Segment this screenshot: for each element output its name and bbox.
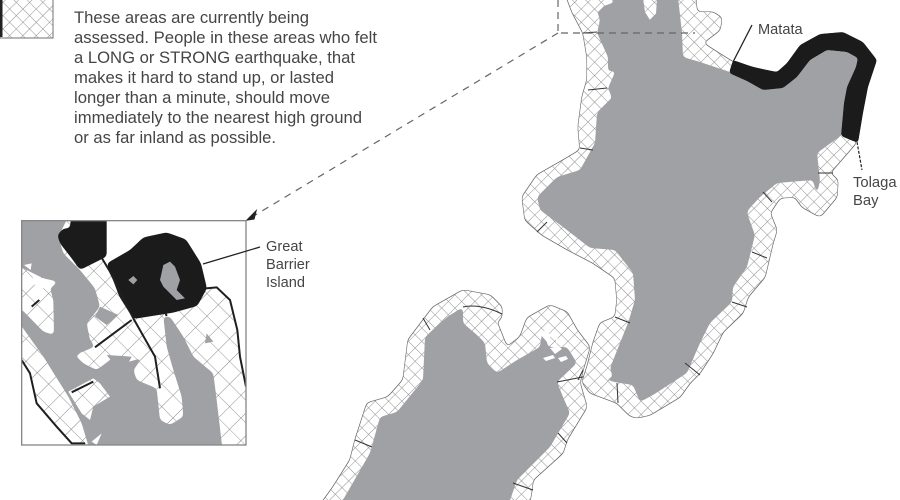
north island map	[522, 0, 877, 418]
inset hatched zone	[22, 221, 246, 445]
inset land patches on the hatch	[95, 307, 213, 367]
north island hatched coastal zone	[522, 0, 857, 418]
Great Barrier Island land	[160, 262, 185, 300]
inset white harbour fragments	[24, 263, 102, 445]
black warning strip: Matata to Tolaga Bay	[729, 32, 877, 143]
legend text block: These areas are currently being	[74, 9, 309, 27]
label: Great Barrier Island: Island	[266, 275, 305, 291]
south island land	[336, 307, 577, 500]
north island inner hatched inlet	[643, 0, 657, 20]
south island hatched coastal zone	[315, 290, 590, 500]
label: Great Barrier Island: Great	[266, 239, 302, 255]
label: Tolaga Bay: Tolaga	[853, 175, 897, 191]
inset northern black zone	[58, 221, 107, 269]
legend text block	[74, 9, 377, 147]
label leader: Tolaga Bay	[857, 142, 862, 170]
south island map	[315, 290, 593, 500]
legend text block: longer than a minute, should move	[74, 89, 330, 107]
inset land	[22, 221, 222, 444]
north island zone boundary ticks	[537, 32, 833, 403]
inset frame	[22, 221, 246, 445]
north island land	[537, 0, 860, 402]
inset hatched peninsula patch	[68, 378, 110, 420]
legend swatch: hatched assessment area	[0, 0, 53, 38]
label: Great Barrier Island: Barrier	[266, 257, 310, 273]
inset coastline and boundary lines	[22, 255, 246, 443]
label: Matata: Matata	[758, 22, 803, 38]
dashed callout frame and arrow to inset	[247, 0, 695, 220]
label leader: Matata	[733, 25, 752, 62]
inset map: Great Barrier Island area	[21, 220, 247, 446]
small island land	[128, 276, 137, 284]
north island top-left harbour fragment	[590, 0, 614, 14]
legend text block: assessed. People in these areas who felt	[74, 29, 377, 47]
label: Tolaga Bay: Bay	[853, 193, 879, 209]
legend text block: or as far inland as possible.	[74, 129, 276, 147]
legend text block: makes it hard to stand up, or lasted	[74, 69, 334, 87]
south island sound fragments	[540, 330, 568, 362]
south island zone boundary ticks	[355, 306, 593, 490]
inset black zone around Great Barrier Island	[107, 232, 207, 319]
legend text block: immediately to the nearest high ground	[74, 109, 362, 127]
arrowhead	[247, 211, 256, 220]
label leader: Great Barrier Island	[203, 247, 260, 264]
legend text block: a LONG or STRONG earthquake, that	[74, 49, 355, 67]
